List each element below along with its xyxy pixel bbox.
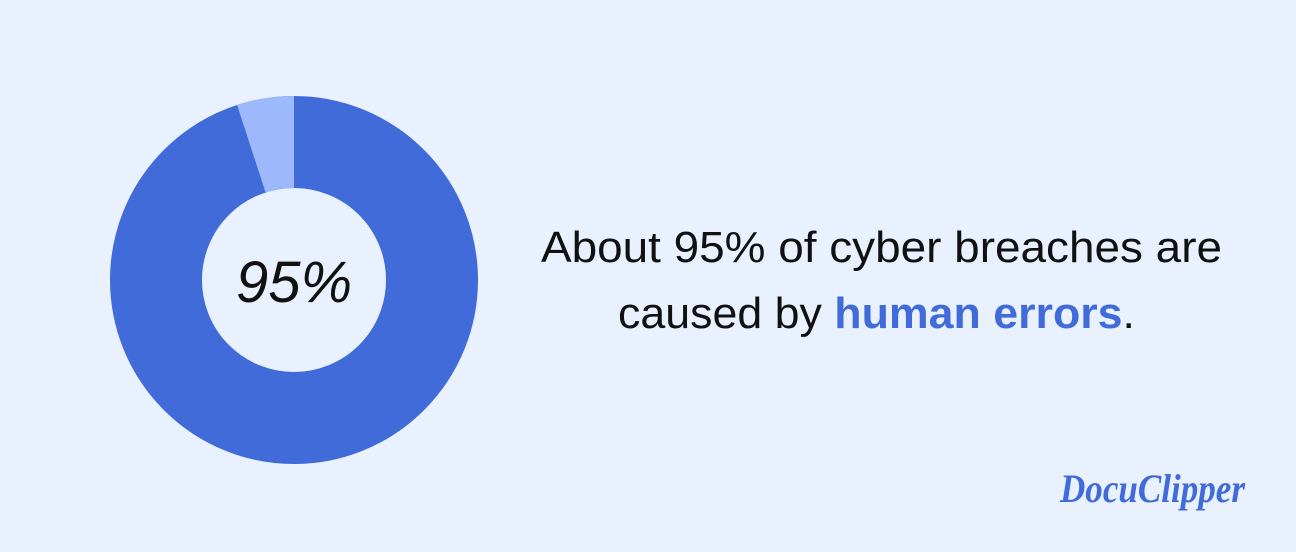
donut chart	[156, 96, 432, 418]
statement text: caused by human errors.	[618, 289, 1135, 338]
statement text	[541, 223, 1222, 338]
statement text: About 95% of cyber breaches are	[541, 223, 1222, 272]
light segment 5%	[237, 96, 294, 192]
logo: DocuClipper: DocuClipper	[1059, 466, 1245, 511]
center label: 95%	[236, 250, 352, 315]
